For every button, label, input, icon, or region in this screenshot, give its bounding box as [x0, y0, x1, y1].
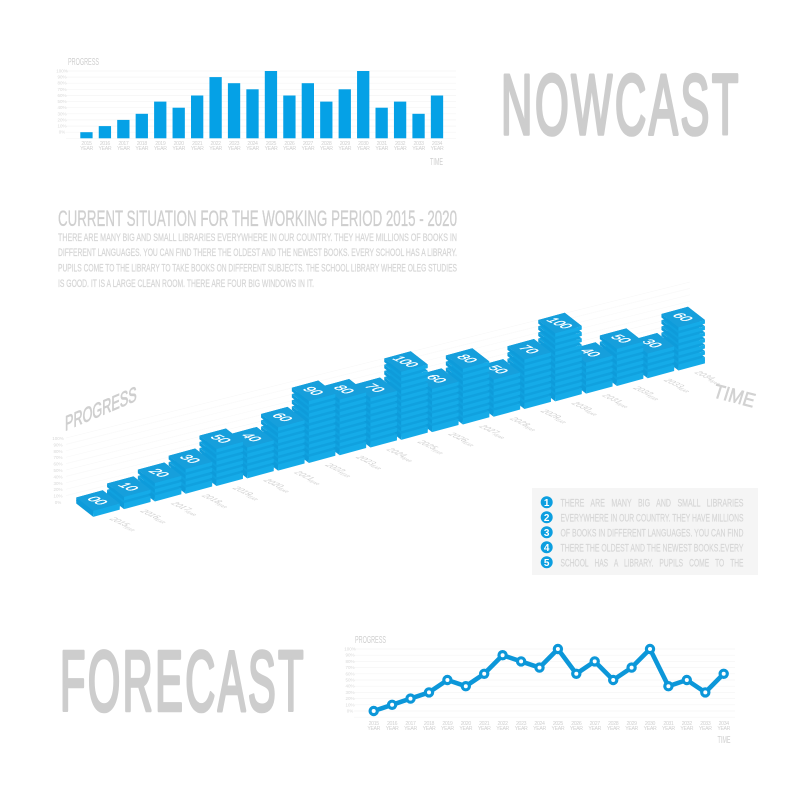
stack 2029: 70: [507, 339, 551, 409]
year labels: 2016: [137, 509, 164, 520]
stack 2018: 30: [169, 449, 212, 494]
x axis year labels: 2029: [627, 721, 637, 727]
x axis year labels: 2024: [534, 721, 545, 727]
stack 2026: 60: [415, 368, 459, 432]
stack 2024: 70: 70: [360, 383, 388, 394]
stack 2030: 100: [538, 313, 582, 401]
year labels: 2018: [198, 493, 225, 505]
stack 2029: 70: 70: [514, 344, 542, 355]
panel: numbered list: [532, 488, 758, 575]
stack 2022: 90: [292, 381, 335, 463]
x axis year labels: YEAR: [423, 726, 436, 732]
x axis year labels: YEAR: [533, 726, 546, 732]
stack 2024: 70: [353, 378, 397, 448]
year labels: YEAR: [120, 526, 135, 532]
year labels: YEAR: [613, 402, 628, 409]
x axis year labels: 2023: [516, 721, 526, 727]
x axis year labels: YEAR: [228, 146, 241, 152]
x axis year labels: 2025: [553, 721, 563, 727]
stack 2017: 20: [138, 462, 181, 501]
x axis year labels: YEAR: [117, 146, 130, 152]
stack 2025: 100: 100: [388, 355, 422, 369]
axis label: time: TIME: [718, 735, 731, 746]
x axis year labels: YEAR: [172, 146, 186, 152]
stack 2017: 20: 20: [144, 468, 173, 479]
x axis year labels: YEAR: [625, 726, 639, 732]
stack 2033: 30: 30: [637, 338, 665, 349]
x axis year labels: 2025: [266, 141, 276, 147]
y axis tick labels: 90%: [345, 653, 355, 658]
x axis year labels: YEAR: [135, 146, 149, 152]
y axis tick labels: 50%: [57, 99, 67, 104]
stack 2032: 50: 50: [606, 333, 635, 345]
year labels: YEAR: [582, 410, 597, 417]
y axis tick labels: 90%: [53, 442, 63, 447]
x axis year labels: YEAR: [644, 726, 657, 732]
x axis year labels: YEAR: [246, 146, 259, 152]
year labels: 2028: [506, 416, 533, 428]
x axis year labels: 2015: [81, 141, 92, 147]
x axis year labels: YEAR: [552, 726, 565, 732]
axis label: progress: PROGRESS: [355, 635, 386, 646]
x axis year labels: YEAR: [496, 726, 510, 732]
x axis year labels: 2030: [645, 721, 655, 727]
item 3: 3: [544, 528, 550, 539]
y axis tick labels: 40%: [345, 684, 355, 689]
x axis year labels: YEAR: [367, 726, 381, 732]
x axis year labels: YEAR: [570, 726, 583, 732]
y axis tick labels: 30%: [53, 481, 63, 486]
text block: current situation: [58, 206, 457, 290]
stack 2026: 60: 60: [421, 373, 450, 385]
y axis tick labels: 10%: [57, 124, 67, 129]
y axis tick labels: 30%: [57, 111, 67, 116]
stack 2033: 30: [631, 333, 674, 378]
item 1: 1: [544, 498, 550, 509]
x axis year labels: 2028: [321, 141, 331, 147]
x axis year labels: 2018: [137, 141, 147, 147]
stack 2032: 50: [600, 328, 643, 386]
x axis year labels: YEAR: [662, 726, 675, 732]
stack 2021: 60: 60: [267, 412, 296, 423]
x axis year labels: YEAR: [209, 146, 223, 152]
x axis year labels: 2016: [387, 721, 397, 727]
x axis year labels: YEAR: [412, 146, 426, 152]
stack 2021: 60: [261, 407, 305, 471]
x axis year labels: 2019: [442, 721, 452, 727]
year labels: YEAR: [181, 510, 197, 517]
x axis year labels: 2020: [174, 141, 184, 147]
x axis year labels: 2017: [405, 721, 416, 727]
x axis year labels: [80, 141, 444, 152]
stack 2031: 40: [569, 342, 613, 394]
stack 2016: 10: [107, 476, 151, 509]
x axis year labels: 2020: [461, 721, 471, 727]
y axis tick labels: 20%: [57, 117, 67, 122]
year labels: YEAR: [489, 433, 505, 440]
line chart: forecast progress over time: [344, 635, 735, 746]
x axis year labels: YEAR: [320, 146, 333, 152]
stack 2016: 10: 10: [113, 481, 142, 493]
year labels: [105, 370, 726, 532]
text: FORECAST: [60, 634, 306, 729]
year labels: 2030: [568, 401, 595, 412]
x axis year labels: YEAR: [191, 146, 204, 152]
x axis year labels: YEAR: [386, 726, 399, 732]
x axis year labels: 2033: [700, 721, 710, 727]
x axis year labels: YEAR: [375, 146, 389, 152]
x axis year labels: 2033: [414, 141, 424, 147]
x axis year labels: 2015: [369, 721, 379, 727]
year labels: 2034: [691, 370, 718, 381]
item 5: [541, 556, 744, 570]
x axis year labels: 2018: [424, 721, 434, 727]
x axis year labels: YEAR: [441, 726, 454, 732]
x axis year labels: YEAR: [357, 146, 370, 152]
bar chart: nowcast progress over time: [56, 57, 456, 168]
year labels: 2025: [414, 440, 441, 451]
stack 2023: 80: [323, 379, 366, 455]
stack 2027: 80: 80: [452, 353, 481, 365]
year labels: YEAR: [366, 464, 382, 470]
body paragraph: DIFFERENT LANGUAGES. YOU CAN FIND THERE THE OLDEST AND THE NEWEST BOOKS. EVERY SCHOOL HAS A LIBRARY.: [58, 247, 457, 259]
x axis year labels: 2022: [211, 141, 221, 147]
axis label: progress: PROGRESS: [68, 57, 99, 68]
stack 2028: 50: [477, 359, 520, 417]
x axis year labels: 2024: [247, 141, 258, 147]
year labels: YEAR: [520, 426, 536, 432]
x axis year labels: YEAR: [283, 146, 296, 152]
x axis year labels: 2034: [432, 141, 442, 147]
stack 2031: 40: 40: [575, 347, 604, 359]
year labels: 2032: [629, 386, 656, 397]
x axis year labels: 2023: [229, 141, 239, 147]
x axis year labels: YEAR: [80, 146, 93, 152]
x axis year labels: YEAR: [699, 726, 712, 732]
year labels: YEAR: [274, 487, 289, 494]
stack 2034: 60: [661, 307, 705, 371]
x axis year labels: YEAR: [717, 726, 731, 732]
y axis tick labels: 0%: [55, 500, 61, 505]
x axis year labels: 2021: [192, 141, 202, 147]
y axis tick labels: 50%: [53, 468, 63, 473]
year labels: 2020: [260, 478, 287, 489]
y axis tick labels: 30%: [345, 690, 355, 695]
year labels: YEAR: [674, 387, 690, 393]
y axis tick labels: 0%: [59, 130, 65, 135]
y axis tick labels: 60%: [57, 93, 67, 98]
year labels: 2021: [291, 470, 317, 481]
x axis year labels: 2027: [303, 141, 313, 147]
bars: [80, 71, 443, 138]
item 2: [541, 511, 744, 524]
x axis year labels: YEAR: [99, 146, 112, 152]
y axis tick labels: 60%: [345, 671, 355, 676]
x axis year labels: 2022: [498, 721, 508, 727]
stack 2015: 00: [76, 490, 120, 517]
year labels: 2026: [445, 432, 472, 443]
year labels: 2029: [537, 409, 563, 420]
stack 2022: 90: 90: [298, 386, 327, 397]
x axis year labels: [367, 721, 731, 732]
year labels: 2015: [106, 517, 133, 528]
year labels: 2033: [660, 378, 687, 389]
x axis year labels: 2026: [284, 141, 294, 147]
stack 2020: 40: 40: [236, 432, 265, 443]
item 3: [541, 526, 744, 540]
year labels: YEAR: [243, 495, 259, 501]
x axis year labels: YEAR: [265, 146, 278, 152]
data line: [374, 649, 724, 711]
y axis tick labels: [344, 646, 356, 714]
item 4: 4: [544, 543, 550, 554]
x axis year labels: YEAR: [478, 726, 491, 732]
x axis year labels: 2028: [608, 721, 618, 727]
year labels: 2017: [167, 501, 194, 512]
year labels: 2023: [352, 455, 379, 466]
year labels: YEAR: [705, 379, 721, 386]
x axis year labels: YEAR: [680, 726, 694, 732]
stack 2019: 50: 50: [206, 434, 234, 445]
y axis tick labels: 100%: [344, 646, 356, 652]
isometric stacked bar chart: [52, 282, 758, 532]
x axis year labels: 2031: [663, 721, 673, 727]
data points: [370, 645, 727, 715]
x axis year labels: YEAR: [607, 726, 620, 732]
y axis tick labels: [52, 436, 64, 505]
y axis tick labels: 20%: [345, 696, 355, 701]
y axis tick labels: [56, 68, 68, 135]
body paragraph: PUPILS COME TO THE LIBRARY TO TAKE BOOKS ON DIFFERENT SUBJECTS. THE SCHOOL LIBRARY WHERE OLEG STUDIES: [58, 262, 457, 274]
stack 2023: 80: 80: [329, 384, 357, 395]
y axis tick labels: 50%: [345, 678, 355, 682]
y axis tick labels: 40%: [57, 105, 67, 110]
stack 2028: 50: 50: [483, 364, 511, 375]
y axis tick labels: 60%: [53, 462, 63, 467]
x axis year labels: 2026: [571, 721, 581, 727]
item 4: [541, 541, 744, 554]
axis label: progress: PROGRESS: [65, 383, 137, 436]
y axis tick labels: 90%: [57, 75, 67, 80]
x axis year labels: 2030: [358, 141, 368, 147]
stack 2018: 30: 30: [175, 454, 203, 465]
item 5: 5: [544, 558, 550, 569]
stack 2027: 80: [446, 348, 489, 424]
x axis year labels: YEAR: [302, 146, 315, 152]
axis label: time: TIME: [710, 381, 758, 412]
year labels: YEAR: [459, 441, 474, 447]
year labels: 2024: [383, 447, 410, 458]
y axis tick labels: 80%: [345, 659, 355, 664]
body paragraph: IS GOOD. IT IS A LARGE CLEAN ROOM. THERE ARE FOUR BIG WINDOWS IN IT.: [58, 278, 314, 290]
year labels: 2027: [475, 424, 502, 435]
x axis year labels: 2021: [479, 721, 489, 727]
y axis tick labels: 0%: [347, 708, 353, 714]
x axis year labels: 2029: [340, 141, 350, 147]
year labels: YEAR: [212, 503, 228, 509]
year labels: YEAR: [551, 418, 567, 424]
x axis year labels: YEAR: [588, 726, 602, 732]
x axis year labels: 2027: [590, 721, 600, 727]
y axis tick labels: 100%: [52, 436, 64, 441]
x axis year labels: 2034: [719, 721, 729, 727]
axis label: time: TIME: [430, 157, 443, 168]
y axis tick labels: 70%: [53, 455, 63, 460]
x axis year labels: YEAR: [431, 146, 444, 152]
y axis tick labels: 100%: [56, 68, 68, 74]
year labels: YEAR: [428, 449, 443, 455]
year labels: YEAR: [335, 472, 351, 478]
x axis year labels: 2019: [155, 141, 165, 147]
year labels: 2031: [599, 393, 625, 404]
item 1: [541, 496, 744, 510]
x axis year labels: YEAR: [459, 726, 473, 732]
y axis tick labels: 70%: [57, 87, 67, 92]
y axis tick labels: 40%: [53, 474, 63, 479]
x axis year labels: YEAR: [154, 146, 167, 152]
y axis tick labels: 10%: [53, 494, 63, 499]
x axis year labels: 2017: [118, 141, 128, 147]
year labels: 2019: [229, 486, 255, 497]
x axis year labels: YEAR: [515, 726, 528, 732]
stack 2025: 100: [384, 351, 428, 440]
x axis year labels: YEAR: [338, 146, 352, 152]
item 2: 2: [544, 513, 550, 524]
year labels: YEAR: [397, 456, 413, 463]
stack 2015: 00: 00: [82, 495, 111, 507]
year labels: YEAR: [151, 518, 166, 524]
stack 2034: 60: 60: [668, 312, 696, 323]
x axis year labels: 2016: [100, 141, 110, 147]
heading: CURRENT SITUATION FOR THE WORKING PERIOD 2015 - 2020: [58, 206, 457, 231]
year labels: YEAR: [643, 395, 659, 401]
year labels: YEAR: [305, 479, 320, 486]
x axis year labels: 2032: [395, 141, 405, 147]
stack 2019: 50: [199, 428, 243, 486]
y axis tick labels: 10%: [345, 702, 355, 707]
stack 2020: 40: [230, 427, 274, 478]
stack 2030: 100: 100: [542, 317, 576, 330]
x axis year labels: 2031: [377, 141, 387, 147]
body paragraph: [58, 232, 457, 290]
y axis tick labels: 80%: [57, 81, 67, 86]
x axis year labels: YEAR: [404, 726, 417, 732]
body paragraph: THERE ARE MANY BIG AND SMALL LIBRARIES EVERYWHERE IN OUR COUNTRY. THEY HAVE MILLIONS OF BOOKS IN: [58, 232, 457, 244]
x axis year labels: 2032: [682, 721, 692, 727]
y axis tick labels: 70%: [345, 665, 355, 670]
y axis tick labels: 20%: [53, 487, 63, 492]
y axis tick labels: 80%: [53, 449, 63, 454]
year labels: 2022: [321, 463, 348, 474]
x axis year labels: YEAR: [394, 146, 407, 152]
